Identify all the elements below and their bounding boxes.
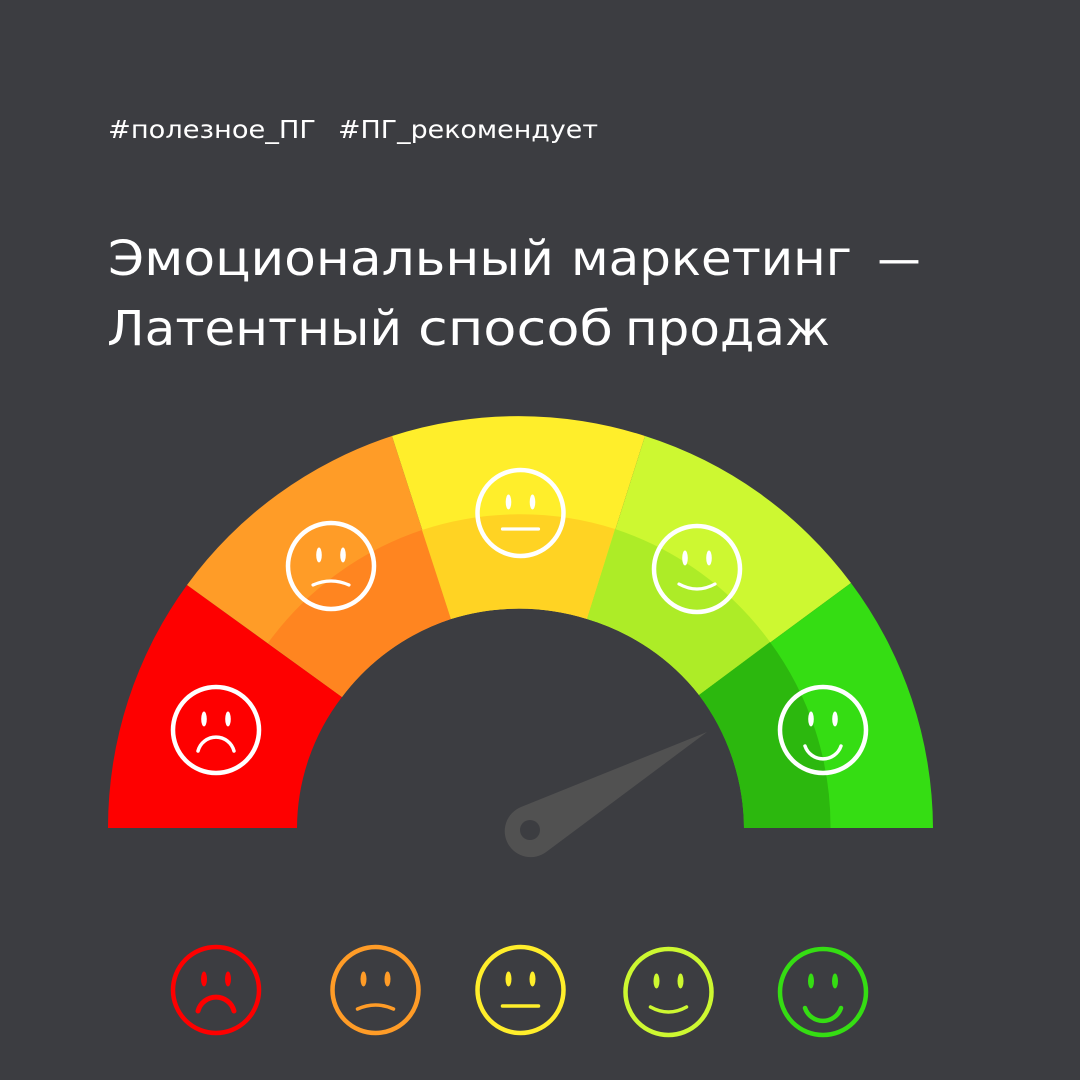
legend face: green [780,949,866,1035]
legend faces [173,947,866,1035]
gauge face: big smile [780,687,866,773]
needle [505,732,707,857]
segment: red [108,585,342,828]
title: Эмоциональный [108,231,554,287]
hashtags [108,115,598,144]
gauge face: sad [288,523,374,609]
title: способ [418,301,613,357]
segment: lime [587,436,851,695]
gauge face: neutral [478,470,564,556]
gauge face: smile [654,526,740,612]
legend face: orange [332,947,418,1033]
title: — [878,231,920,287]
title: Латентный [107,301,402,357]
segment: green [699,583,933,828]
gauge face: very sad [173,687,259,773]
title: продаж [625,301,830,357]
segment: orange [187,436,451,697]
legend face: red [173,947,259,1033]
gauge [108,416,933,828]
hashtags: #ПГ_рекомендует [338,115,598,144]
title: маркетинг [571,231,852,287]
hashtags: #полезное_ПГ [108,115,316,144]
segment: yellow [392,416,645,619]
legend face: yellow [478,947,564,1033]
title [107,231,920,357]
legend face: lime [626,949,712,1035]
